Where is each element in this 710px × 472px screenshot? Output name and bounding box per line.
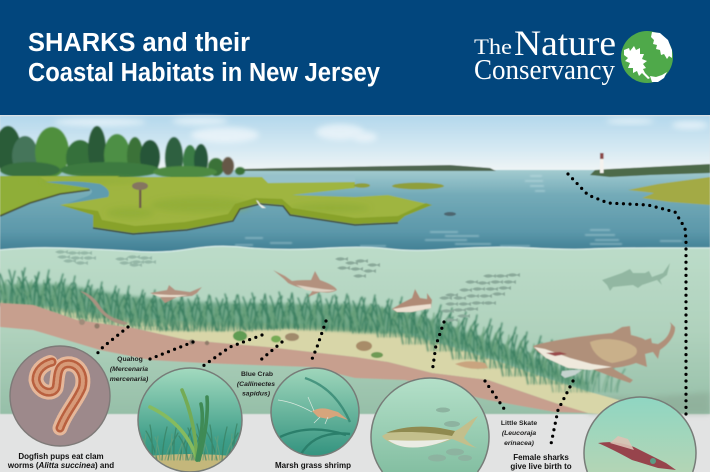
egret (256, 200, 266, 208)
clam and crab details (79, 319, 488, 369)
label: little skate: Little Skate (501, 420, 537, 427)
circle: clam worm (10, 346, 110, 446)
sand (0, 300, 640, 414)
left marsh shadow (0, 190, 90, 216)
caption: dogfish pups: worms (Alitta succinea) and (8, 461, 114, 470)
circle: marsh grass shrimp (271, 368, 359, 456)
title (28, 29, 381, 87)
shark: left (150, 285, 202, 303)
water surface line (0, 246, 710, 252)
caption: female sharks: give live birth to (510, 462, 572, 471)
osprey platform (132, 182, 148, 208)
main marsh (40, 177, 432, 233)
bluefish (382, 416, 478, 448)
shark: centre small (392, 289, 432, 312)
shrimp (312, 408, 348, 420)
sediment band (0, 303, 588, 413)
upper creek (240, 175, 355, 183)
left marsh (0, 176, 120, 216)
worm (36, 362, 83, 428)
marsh edge grass (60, 198, 432, 233)
squid (598, 442, 676, 470)
fish school: top left (55, 250, 156, 267)
header band (0, 0, 710, 115)
circle: squid (584, 397, 696, 472)
logo: The Nature Conservancy: Nature (514, 23, 616, 63)
sand tiger shark: large foreground (533, 322, 675, 383)
creek channel (45, 181, 109, 204)
dotted leader lines (95, 174, 686, 449)
label: quahog: mercenaria) (110, 376, 149, 383)
underwater zone (0, 246, 710, 414)
label: quahog: Quahog (117, 356, 143, 363)
label: quahog: (Mercenaria (110, 366, 148, 373)
bay water (0, 170, 710, 252)
logo: The Nature Conservancy: The (474, 34, 512, 59)
title: SHARKS and their (28, 29, 250, 57)
right marsh (628, 177, 710, 205)
caption: female sharks: Female sharks (513, 453, 569, 462)
illustrated scene (0, 116, 710, 414)
label: blue crab: sapidus) (242, 390, 271, 398)
label: little skate: (Leucoraja (502, 430, 536, 437)
eel / burrowing fish (80, 291, 128, 325)
seagrass clumps (0, 268, 625, 392)
background blades (280, 378, 350, 456)
marsh shade patches (40, 178, 370, 219)
background fish (428, 408, 472, 462)
label: blue crab: Blue Crab (241, 371, 273, 378)
species labels (110, 356, 537, 447)
label: blue crab: (Callinectes (237, 381, 275, 388)
label: little skate: erinacea) (504, 440, 535, 447)
shark: upper centre (273, 270, 337, 297)
grass base shading (0, 284, 590, 392)
main marsh shadow line (93, 204, 398, 234)
distant shoreline right (590, 164, 710, 177)
caption: marsh grass shrimp: Marsh grass shrimp (275, 461, 351, 470)
clouds (54, 117, 708, 143)
seabed shading (575, 392, 710, 414)
tree line (0, 126, 245, 179)
sky (0, 116, 710, 172)
small islands (354, 183, 444, 189)
sandy seabed (153, 454, 227, 472)
eelgrass blades (150, 390, 207, 460)
logo: The Nature Conservancy (474, 23, 673, 86)
shark: distant ghost (602, 263, 670, 291)
caption: dogfish pups: Dogfish pups eat clam (18, 452, 104, 461)
distant shoreline left (240, 165, 496, 171)
circle: eelgrass (137, 367, 243, 472)
fish school: centre (335, 257, 520, 322)
circle: bluefish (371, 378, 489, 472)
logo: The Nature Conservancy: Conservancy (474, 54, 615, 86)
lighthouse (600, 153, 604, 173)
water ripples (235, 176, 682, 246)
bird on water (444, 212, 456, 216)
title: Coastal Habitats in New Jersey (28, 59, 381, 87)
